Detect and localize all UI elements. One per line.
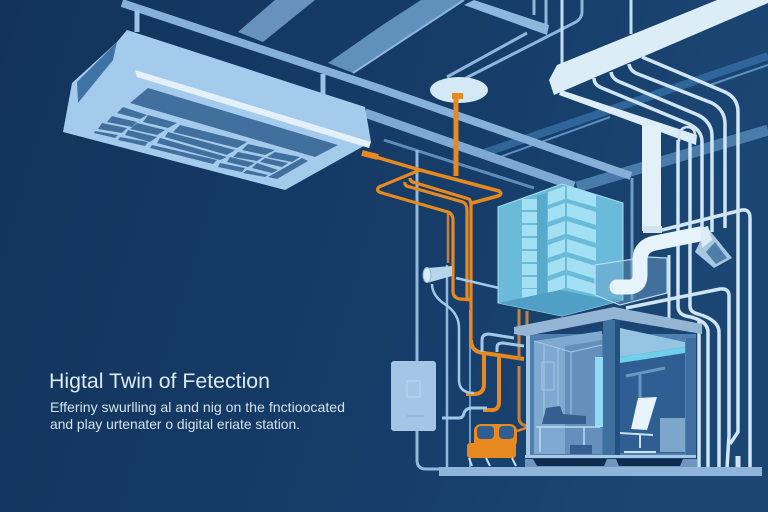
white piping right <box>549 0 768 468</box>
glass office room <box>514 307 702 467</box>
white drain pipe and glass box <box>595 125 732 305</box>
description text: Efferiny swurlling al and nig on the fnctioocated <box>50 399 345 415</box>
ceiling beams <box>122 0 768 469</box>
title: Higtal Twin of Fetection <box>49 370 270 393</box>
light distribution pipes left <box>432 278 524 418</box>
ceiling sensor disc <box>430 77 488 103</box>
camera sensor <box>423 266 452 283</box>
description text <box>50 399 345 432</box>
orange sofa <box>467 424 526 466</box>
wall control panel <box>391 361 436 431</box>
orange pipe network <box>362 96 527 426</box>
air conditioning unit <box>63 30 371 190</box>
data server cube <box>498 184 623 316</box>
description text: and play urtenater o digital eriate station. <box>50 416 300 432</box>
floor slab <box>439 467 762 476</box>
